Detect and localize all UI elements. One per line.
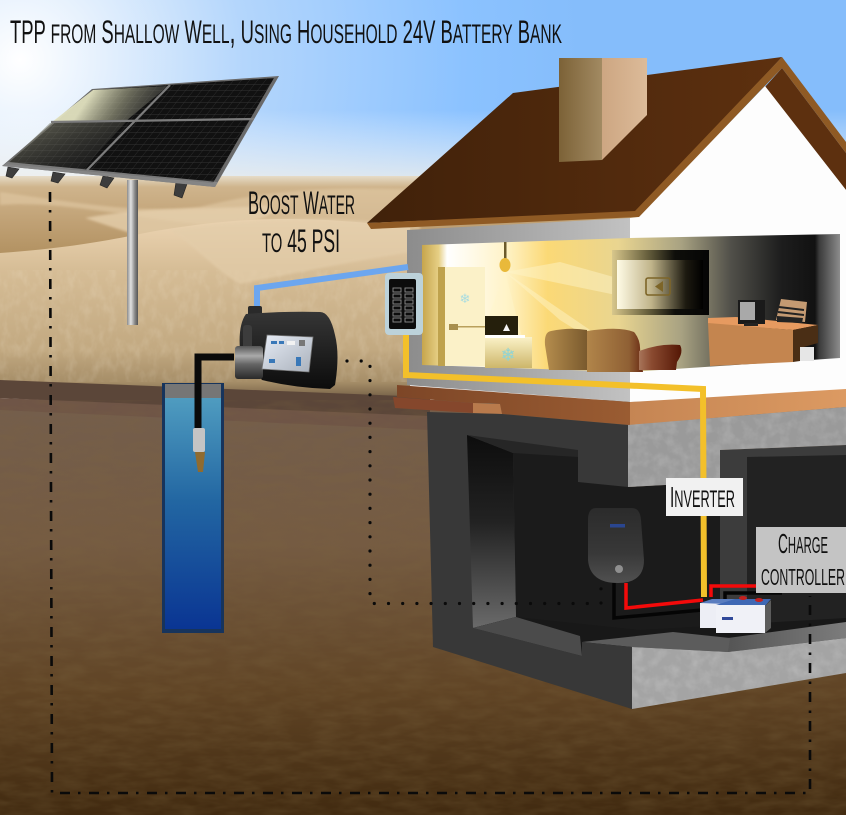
dash-dot solar cable [50,192,810,793]
recess lintel [467,435,578,457]
slab side [582,642,632,709]
rear battery [700,603,726,628]
slab recess [728,622,846,652]
eave trim [367,57,782,229]
light rays [470,262,660,368]
control panel [262,335,313,372]
refrigerator [438,267,485,366]
sofa [545,329,681,372]
front battery [716,605,765,633]
sun reflection [52,86,168,122]
left recess side wall [467,435,516,628]
roof slope [367,57,782,223]
microwave [485,316,518,336]
panel cells [7,78,274,183]
yellow power cable [406,334,704,597]
back wall [513,450,846,640]
label: inverter: Inverter [670,477,735,515]
foundation trim band [393,385,846,425]
gable right [765,68,846,190]
inverter unit [588,508,644,583]
refrigerator: ❄ [460,292,470,307]
panel frame [2,76,279,187]
slab top [582,632,730,652]
black wiring [614,583,782,618]
label: inverter [666,477,743,516]
battery bank [700,596,771,633]
kitchen cabinet [485,335,532,368]
support post [127,180,138,325]
dotted control wire [347,361,601,604]
red wiring [626,583,758,608]
label: boost water: to 45 PSI [262,219,340,261]
basement floor [473,617,846,656]
water well [162,383,224,633]
chair [776,299,807,323]
keypad controller [385,273,423,335]
sky [0,0,846,200]
pump body [240,312,338,389]
desk [708,317,818,366]
television [612,250,709,315]
suction pipe [198,357,234,430]
basement cutaway [427,407,846,709]
house cutaway walls [407,218,846,402]
mounting brackets [6,167,187,198]
label: charge controller [756,523,846,593]
label: boost water [248,181,355,261]
booster pump [235,306,338,389]
desktop monitor [738,300,765,326]
pump outlet [248,306,262,316]
frame dividers [51,85,254,170]
chimney [559,58,647,162]
underground soil [0,380,846,815]
kitchen cabinet: ❄ [500,345,516,366]
dark outer concrete [427,412,632,709]
solar panel array [2,76,279,325]
grass field [0,219,410,400]
slab front [632,638,846,709]
title: TPP from Shallow Well, Using Household 24V Battery Bank [10,10,562,52]
blue water pipe [257,267,408,308]
right recess [720,445,846,632]
ceiling lamp [500,242,510,272]
front battery top [716,599,771,606]
side pipe [243,325,252,350]
white gable wall [630,86,846,402]
house roof [367,57,846,402]
light concrete upper wall [628,407,846,487]
motor head [235,346,263,379]
label: boost water: Boost Water [248,181,355,223]
foot valve [193,428,205,472]
desert dunes background [0,176,846,268]
living room interior [422,234,840,372]
